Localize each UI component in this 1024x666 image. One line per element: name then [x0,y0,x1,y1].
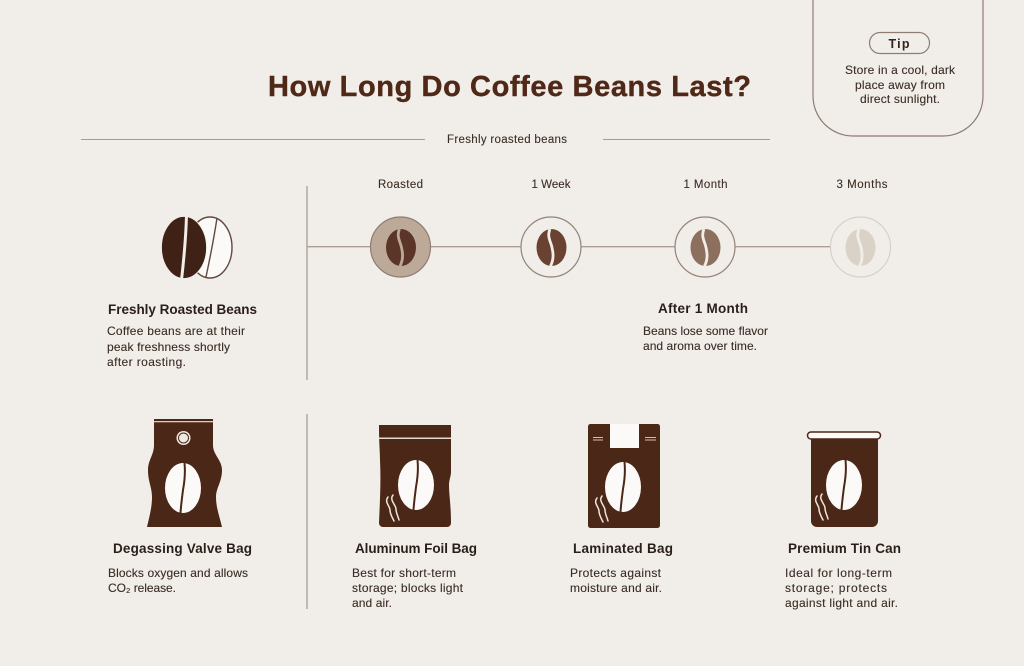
panel: after 1 month text: After 1 Month [658,301,748,316]
icon: laminated bag [588,424,660,528]
section subtitle with rules: Freshly roasted beans [447,134,567,146]
panel: freshly roasted beans text [107,302,257,369]
description: storage; protects [785,581,887,595]
stage: roasted [370,179,430,277]
description: Best for short-term [352,566,456,580]
panel: laminated bag [570,424,673,595]
panel: premium tin can [785,432,901,610]
stage: 1 week [521,179,581,277]
description: Blocks oxygen and allows [108,566,248,580]
stage: 1 week: 1 Week [532,179,571,191]
heading: Premium Tin Can [788,541,901,556]
vertical divider bottom [306,414,308,609]
description: against light and air. [785,596,898,610]
tip pill [870,32,930,54]
title: How Long Do Coffee Beans Last? [268,71,751,103]
heading: Laminated Bag [573,541,673,556]
tip text [845,63,956,106]
icon: roasted beans [162,215,232,280]
panel: after 1 month text [643,301,768,353]
description: Protects against [570,566,662,580]
panel: after 1 month text: and aroma over time. [643,339,757,353]
icon: valve bag [147,419,222,527]
description [570,566,662,595]
description: Ideal for long-term [785,566,892,580]
tip box outline [813,0,983,136]
panel: freshly roasted beans text: Coffee beans are at their [107,324,245,338]
panel: degassing valve bag [108,419,252,595]
description [352,566,464,610]
description: and air. [352,596,392,610]
description: moisture and air. [570,581,662,595]
stage: 1 month: 1 Month [684,179,728,191]
description: CO₂ release. [108,581,176,595]
panel: aluminum foil bag [352,425,477,610]
tip text: place away from [855,78,945,92]
panel: freshly roasted beans text: Freshly Roasted Beans [108,302,257,317]
panel: freshly roasted beans text: peak freshness shortly [107,340,230,354]
vertical divider top [306,186,308,380]
panel: freshly roasted beans text: after roasting. [107,355,186,369]
icon: tin can [808,432,880,527]
panel: after 1 month text: Beans lose some flavor [643,324,768,338]
timeline [307,179,890,277]
tip pill: Tip [888,37,910,51]
stage: 1 month [675,179,735,277]
tip text: Store in a cool, dark [845,63,956,77]
stage: 3 months: 3 Months [836,179,888,191]
tip callout [813,0,983,136]
description [108,566,248,595]
description: storage; blocks light [352,581,464,595]
icon: foil bag [379,425,451,527]
stage: roasted: Roasted [378,179,423,191]
stage: 3 months [830,179,890,277]
description [785,566,898,610]
tip text: direct sunlight. [860,92,940,106]
heading: Aluminum Foil Bag [355,541,477,556]
heading: Degassing Valve Bag [113,541,252,556]
